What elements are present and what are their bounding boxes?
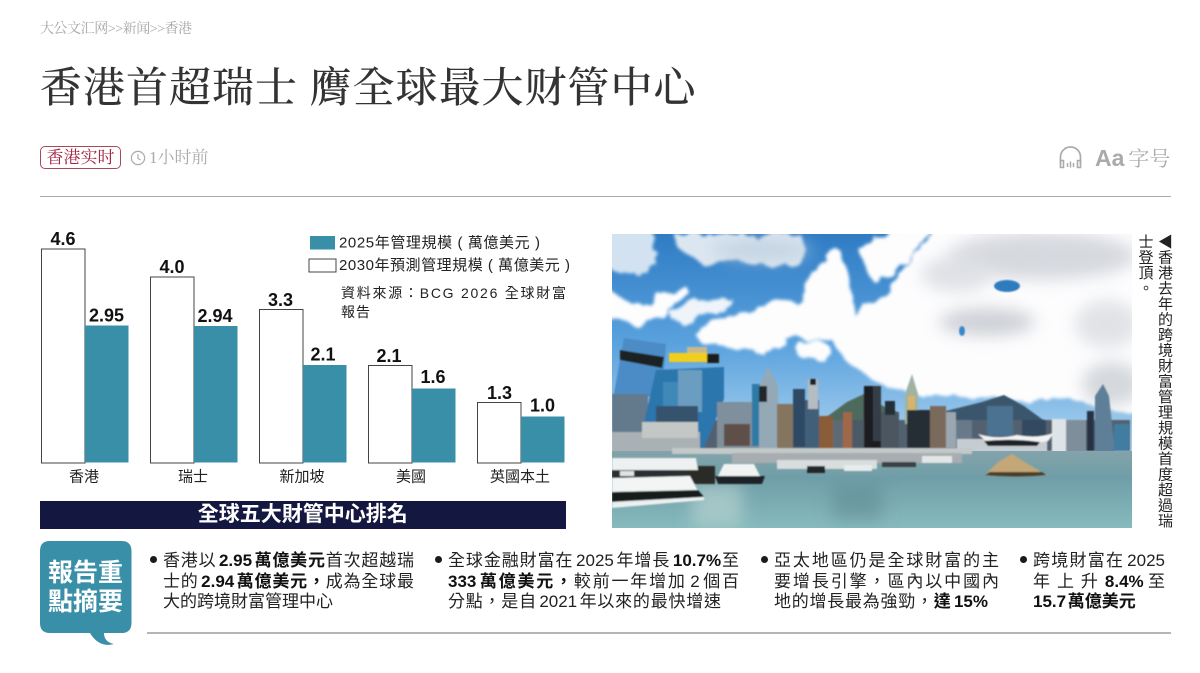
skyline <box>612 338 1130 454</box>
sky <box>612 234 1132 454</box>
group: 新加坡: 2.1 <box>310 344 336 364</box>
callout: 報告重點摘要: 報告重 <box>48 559 123 587</box>
source note: 報告 <box>341 304 371 320</box>
timestamp: 1小时前 <box>149 148 208 167</box>
callout: 報告重點摘要 <box>40 541 132 645</box>
key point 3: 地的增長最為強勁，達 15% <box>774 592 988 611</box>
group: 美國: 美國 <box>396 468 426 486</box>
key point 4: 跨境財富在 2025 <box>1033 551 1165 570</box>
group: 瑞士: 4.0 <box>159 257 185 277</box>
chart title banner: 全球五大財管中心排名 <box>198 503 408 526</box>
source note <box>341 285 566 320</box>
group: 新加坡: 3.3 <box>268 290 293 310</box>
header divider <box>40 196 1171 197</box>
group: 英國本土: 英國本土 <box>490 468 550 486</box>
group: 瑞士: 2.94 <box>197 306 233 326</box>
group: 瑞士: 瑞士 <box>178 468 208 486</box>
icon: headphones <box>1060 146 1082 168</box>
legend: 2030年預測管理規模 ( 萬億美元 ) <box>339 256 570 274</box>
blue glass tower <box>640 367 724 448</box>
key point 3: 要增長引擎，區內以中國內 <box>774 572 999 591</box>
key point 1 <box>150 551 414 611</box>
group: 英國本土: 1.3 <box>487 383 512 403</box>
legend: 2025年管理規模 ( 萬億美元 ) <box>339 234 540 252</box>
key points divider <box>147 632 1171 634</box>
group: 香港 <box>42 229 128 486</box>
group: 美國: 2.1 <box>376 346 402 366</box>
tag: 香港实时: 香港实时 <box>46 148 114 167</box>
convention centre <box>956 433 1054 451</box>
photo caption: ◀香港去年的跨境財富管理規模首度超過瑞士登頂。 <box>1136 234 1173 528</box>
group: 瑞士 <box>150 257 238 486</box>
title: 香港首超瑞士 膺全球最大财管中心 <box>40 66 697 112</box>
group: 香港: 香港 <box>69 468 99 486</box>
tower block left <box>612 338 666 404</box>
key point 3 <box>761 551 999 611</box>
reflections <box>692 484 882 528</box>
legend <box>309 234 570 274</box>
group: 新加坡 <box>260 290 346 486</box>
mountains <box>816 394 1056 439</box>
rock marker <box>984 454 1046 476</box>
mid buildings <box>612 432 700 454</box>
building mass <box>700 420 1130 451</box>
key point 3: 亞太地區仍是全球財富的主 <box>774 551 999 570</box>
key point 1: 大的跨境財富管理中心 <box>163 592 333 611</box>
IFC tower <box>1094 384 1114 452</box>
breadcrumb: 大公文汇网>>新闻>>香港 <box>40 22 192 37</box>
key point 1: 香港以 2.95 萬億美元首次超越瑞 <box>163 551 414 570</box>
key point 4 <box>1020 551 1165 611</box>
photo: Hong Kong harbour skyline <box>612 234 1132 528</box>
group: 新加坡: 新加坡 <box>279 468 325 486</box>
group: 英國本土 <box>478 383 564 486</box>
key point 2: 333 萬億美元，較前一年增加 2 個百 <box>448 572 739 591</box>
callout: 報告重點摘要: 點摘要 <box>48 587 123 616</box>
water <box>612 451 1132 528</box>
group: 美國 <box>368 346 456 486</box>
bar chart: top five wealth centres <box>41 229 570 486</box>
ferry left <box>676 466 714 484</box>
key point 2: 全球金融財富在 2025 年增長 10.7%至 <box>448 551 739 570</box>
group: 英國本土: 1.0 <box>530 396 555 416</box>
font size control: Aa字号 <box>1095 145 1170 171</box>
group: 香港: 2.95 <box>89 306 124 326</box>
dark twin towers <box>864 386 880 448</box>
chart title banner <box>40 501 566 528</box>
clouds <box>598 222 1142 416</box>
yellow sign <box>668 353 706 362</box>
group: 香港: 4.6 <box>50 229 76 249</box>
small boat <box>718 464 760 476</box>
key point 2: 分點，是自 2021 年以來的最快增速 <box>448 592 721 611</box>
marina boats <box>612 448 972 508</box>
key point 1: 士的 2.94 萬億美元，成為全球最 <box>163 572 414 591</box>
group: 美國: 1.6 <box>420 367 446 387</box>
source note: 資料來源：BCG 2026 全球財富 <box>341 285 566 301</box>
key point 4: 15.7 萬億美元 <box>1033 592 1136 611</box>
tag: 香港实时 <box>40 146 121 169</box>
key point 2 <box>435 551 739 611</box>
key point 4: 年 上 升 8.4% 至 <box>1033 572 1165 591</box>
central plaza tower <box>904 374 918 424</box>
icon: clock <box>130 150 146 166</box>
